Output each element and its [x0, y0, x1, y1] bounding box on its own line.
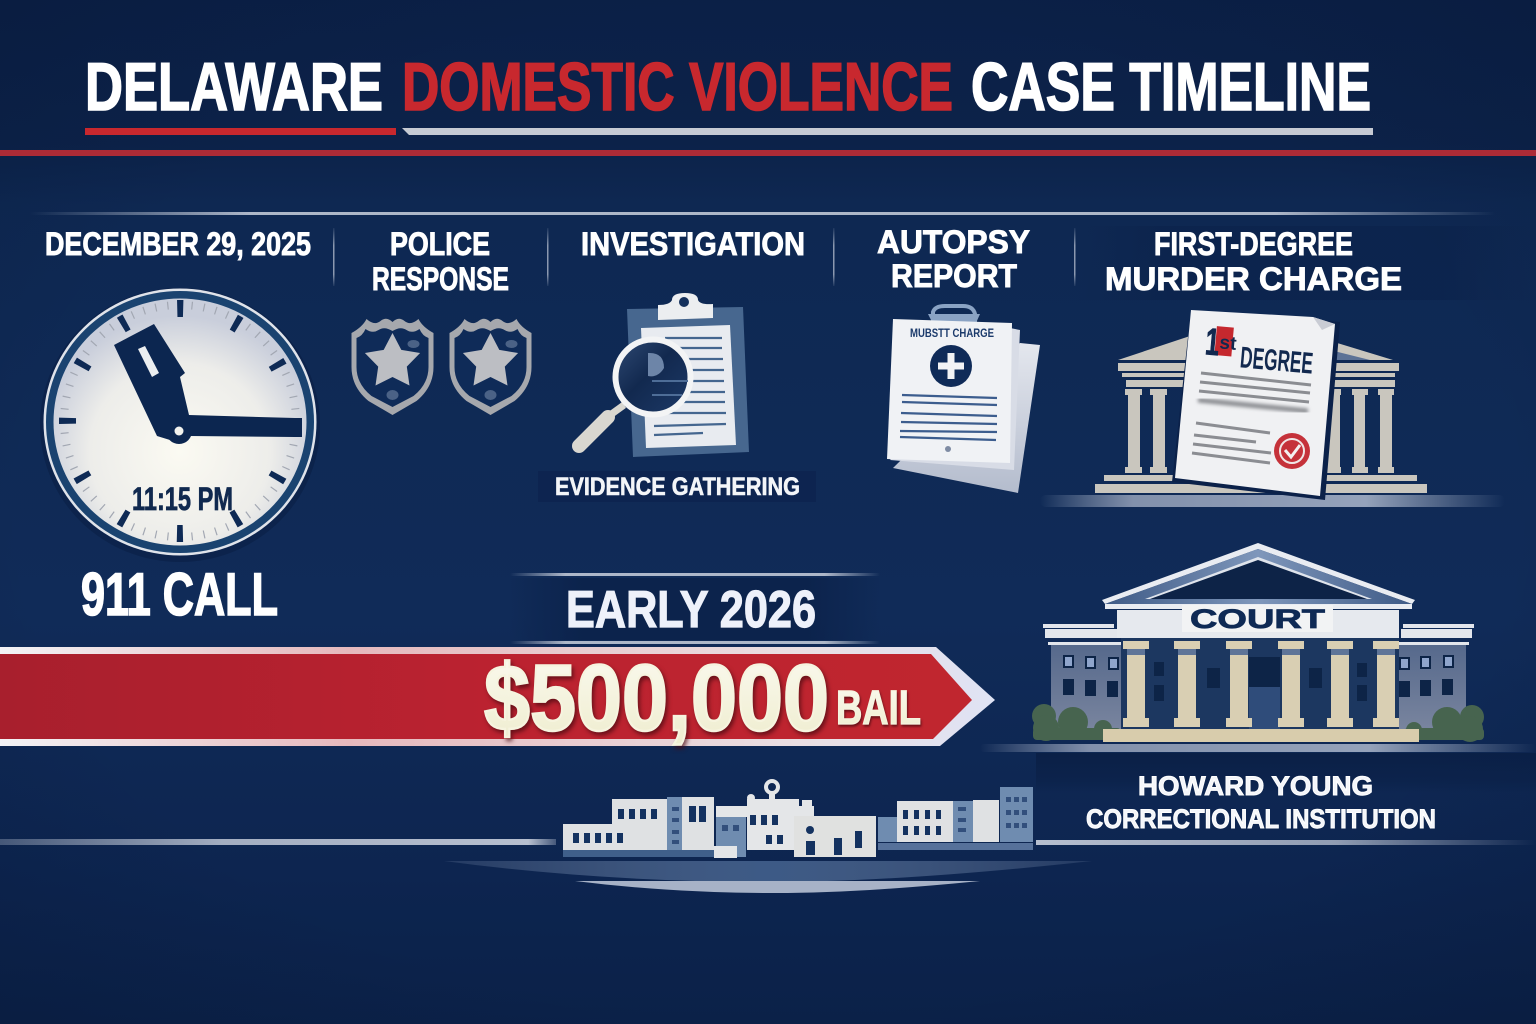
icon: police badge left: [352, 319, 434, 415]
columns: [1123, 641, 1399, 727]
step heading: December 29, 2025: DECEMBER 29, 2025: [45, 226, 311, 262]
clock: [40, 288, 320, 562]
clock hands: [114, 324, 302, 444]
step heading: first-degree murder charge: FIRST-DEGREE: [1154, 226, 1353, 262]
step heading: police response: [372, 226, 509, 297]
title: DOMESTIC VIOLENCE: [402, 49, 953, 125]
bail label: BAIL: [836, 682, 921, 735]
title: DELAWARE: [85, 49, 383, 125]
step heading: autopsy report: REPORT: [891, 258, 1017, 294]
date heading: early 2026: EARLY 2026: [566, 581, 816, 639]
1st degree stamp: DEGREE: [1239, 341, 1314, 381]
correctional institution label: HOWARD YOUNG: [1138, 771, 1373, 801]
title: CASE TIMELINE: [971, 49, 1371, 125]
title underline: [0, 128, 1536, 156]
date heading: early 2026: [510, 573, 880, 644]
step heading: police response: POLICE: [390, 226, 490, 262]
title: [85, 49, 1371, 125]
correctional institution label: [1036, 753, 1536, 834]
bushes: [1032, 704, 1484, 742]
pediment roof: [1102, 543, 1415, 604]
central hall: [1121, 638, 1399, 730]
icon: correctional institution buildings: [563, 781, 1033, 858]
bail amount: $500,000: [484, 645, 829, 750]
left and right wings: [1043, 624, 1474, 737]
icon: courthouse behind charge document: [1040, 310, 1505, 507]
icon: autopsy report document: [887, 306, 1040, 493]
step heading: police response: RESPONSE: [372, 261, 509, 297]
plinth: [1103, 729, 1419, 742]
1st degree stamp: [1203, 321, 1316, 381]
step heading: autopsy report: [877, 224, 1030, 294]
step heading: first-degree murder charge: [1076, 226, 1536, 300]
911 call label: 911 CALL: [81, 561, 278, 628]
central tower building: [716, 781, 814, 850]
icon: clipboard with magnifier: [579, 293, 749, 457]
entablature: [1105, 604, 1412, 638]
entablature: COURT: [1190, 604, 1326, 634]
icon: police badge right: [450, 319, 532, 415]
step heading: autopsy report: AUTOPSY: [877, 224, 1030, 260]
icon: autopsy report document: MUBSTT CHARGE: [910, 328, 994, 340]
step heading: first-degree murder charge: MURDER CHARGE: [1105, 261, 1402, 297]
evidence gathering label: EVIDENCE GATHERING: [555, 473, 800, 501]
1st degree stamp: st: [1219, 332, 1238, 355]
clock time: 11:15 PM: [132, 481, 233, 517]
bail arrow banner: [0, 645, 995, 750]
step heading: investigation: INVESTIGATION: [581, 226, 805, 262]
courthouse: [980, 543, 1536, 752]
1st degree stamp: 1: [1204, 321, 1221, 364]
correctional institution label: CORRECTIONAL INSTITUTION: [1086, 804, 1436, 834]
prison complex ground: [444, 861, 1092, 893]
